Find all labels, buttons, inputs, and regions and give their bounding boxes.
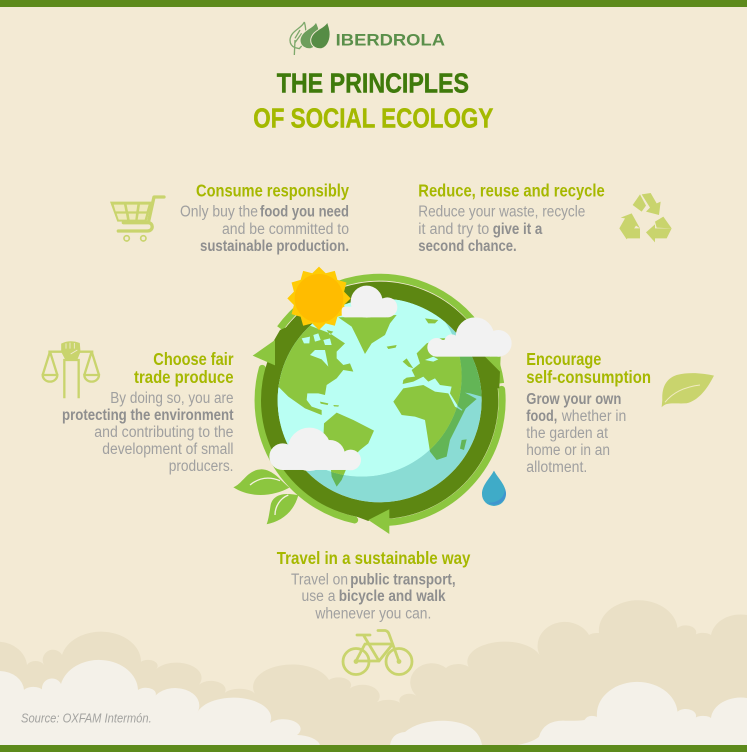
panel: encourage self-consumption [526,349,714,476]
icon: bicycle [343,630,412,674]
heading: Travel in a sustainable way [277,548,471,568]
body text [526,391,626,476]
body text: whether in [561,408,626,425]
front cloud layer [0,660,747,745]
body text: By doing so, you are [110,390,234,407]
icon: scales with fist [43,342,99,398]
body text [418,204,585,255]
dark green ring [269,290,490,511]
logo: Iberdrola [290,22,445,55]
top bar [0,0,747,7]
body text: development of small [102,441,234,458]
body text: public transport, [350,571,456,588]
title: THE PRINCIPLES [277,68,469,99]
water drop [482,471,506,506]
heading: Consume responsibly [196,181,349,201]
heading: trade produce [134,367,234,387]
body text [180,204,349,255]
icon: shopping cart [110,197,164,241]
body text: use a [302,588,336,605]
body text: producers. [169,458,234,475]
body text: Travel on [291,571,348,588]
heading: Reduce, reuse and recycle [418,181,605,201]
body text [291,571,456,622]
sun [287,267,351,330]
body text: food you need [260,204,349,221]
icon: logo leaves [290,22,330,55]
cloud: lower left [269,428,361,471]
source note: Source: OXFAM Intermón. [21,711,152,726]
icon: recycle arrows [619,193,672,242]
heading: Encourage [526,349,602,369]
light green arrow ring [258,277,502,522]
body text: it and try to [418,221,489,238]
body text: food, [526,408,557,425]
cloud: right [427,317,512,357]
leaves [233,469,298,524]
heading [134,349,234,387]
title [253,68,494,133]
body text: whenever you can. [315,605,431,622]
body text: second chance. [418,238,517,255]
body text: and be committed to [222,221,349,238]
body text: give it a [493,221,543,238]
logo wordmark: IBERDROLA [336,31,445,49]
panel: choose fair trade produce [43,342,234,475]
panel: travel in a sustainable way [277,548,471,674]
body text: home or in an [526,442,610,459]
icon: leaf [662,373,714,407]
body text: protecting the environment [62,407,234,424]
back cloud layer [0,600,747,745]
body text: Only buy the [180,204,258,221]
body text: allotment. [526,459,587,476]
bottom bar [0,745,747,752]
body text: bicycle and walk [339,588,446,605]
title: OF SOCIAL ECOLOGY [253,102,494,133]
body text: Reduce your waste, recycle [418,204,585,221]
panel: reduce, reuse and recycle [418,181,672,255]
body text: sustainable production. [200,238,349,255]
body text [62,390,234,475]
globe [278,298,482,502]
body text: the garden at [526,425,609,442]
heading [526,349,651,387]
heading: self-consumption [526,367,651,387]
heading: Choose fair [153,349,234,369]
body text: and contributing to the [94,424,234,441]
body text: Grow your own [526,391,621,408]
illustration: earth with recycling ring [233,267,512,534]
ring arrowheads [253,318,501,534]
cloud: top [342,286,397,318]
panel: consume responsibly [110,181,349,255]
